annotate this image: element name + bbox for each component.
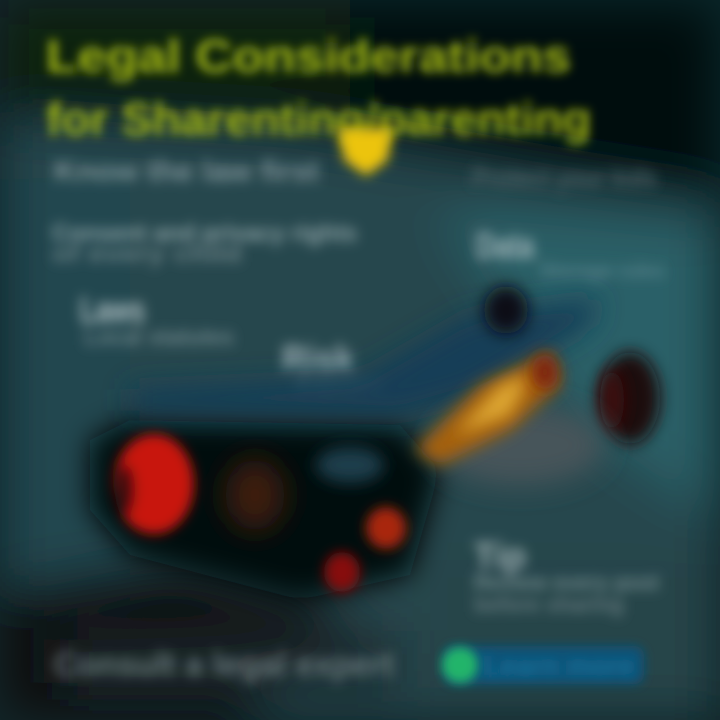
title: for Sharenting/parenting [46,93,591,145]
text block: lower right: before sharing [474,592,624,617]
text block: lower right: Review every post [474,570,660,595]
text block: right heading: Storage rules [540,258,665,283]
subtitle left: Know the law first [54,155,319,188]
right wheel [600,352,660,444]
footer button: Learn more [484,650,634,681]
car body shadow [90,420,440,600]
red edge [532,354,558,390]
text block: right heading [476,225,665,283]
grey chassis [435,405,605,485]
subtitle right: Protect your kids [472,162,657,193]
amber center glow [225,459,285,531]
title [46,30,591,145]
text block: intro [52,220,357,268]
footer text: Consult a legal expert [54,646,394,684]
blue center window [316,447,384,483]
small red lights [366,507,406,549]
yellow fender highlight [455,375,530,435]
text block: center callout: Exposure [296,375,386,397]
text block: lower right [474,535,660,617]
illustration: car [90,286,660,600]
footer button [442,646,644,684]
text block: intro: Consent and privacy rights [52,220,357,247]
text block: left callout: Laws [80,289,145,330]
text block: center callout [282,339,386,397]
text block: intro: of every child [52,241,242,268]
car roof dark spot [484,286,528,334]
text block: center callout: Risk [282,339,355,381]
text block: right heading: Data [476,225,535,266]
title: Legal Considerations [46,30,571,82]
car blue upper body [130,298,600,415]
text block: left callout: Local statutes [84,324,234,351]
text block: lower right: Tip [474,535,526,576]
red left light [114,434,194,534]
icon: yellow gavel highlight [338,128,392,176]
text block: left callout [80,289,234,351]
orange fender [415,352,560,465]
